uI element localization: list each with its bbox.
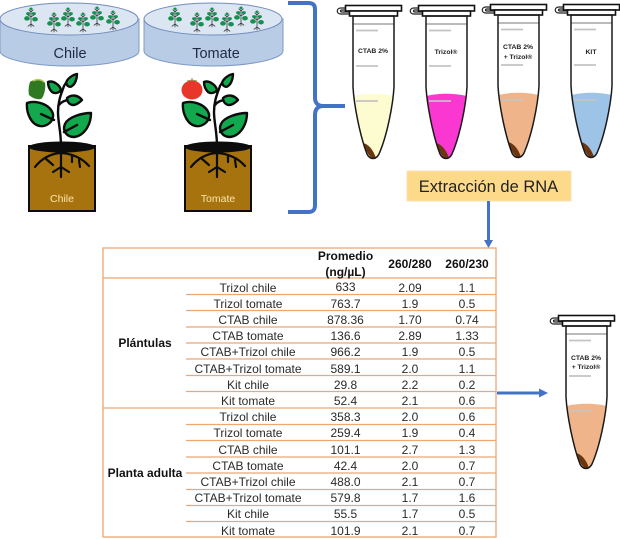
rows: Plántulas: 1.9 (402, 297, 419, 311)
table header: 260/280 (388, 257, 432, 271)
rows: Planta adulta: 488.0 (330, 475, 361, 489)
rows: Planta adulta: 0.7 (459, 524, 476, 538)
group label: Planta adulta: Planta adulta (108, 466, 183, 480)
rows: Plántulas: 52.4 (334, 394, 358, 408)
tube label: CTAB 2% (358, 48, 388, 55)
rows: Planta adulta: CTAB tomate (212, 459, 284, 473)
table header: 260/230 (445, 257, 489, 271)
rows: Planta adulta: 1.6 (459, 491, 476, 505)
rows: Plántulas: Trizol chile (220, 281, 277, 295)
rows: Plántulas: 0.74 (455, 313, 479, 327)
arrow: table to selected tube (497, 388, 548, 398)
rows: Plántulas: 589.1 (330, 362, 361, 376)
rows: Plántulas: 0.2 (459, 378, 476, 392)
table header: Promedio (318, 249, 373, 263)
tube: KIT (555, 4, 620, 158)
rows: Planta adulta: CTAB+Trizol chile (200, 475, 296, 489)
icon: green pepper (29, 80, 45, 99)
rows: Plántulas: 1.33 (455, 329, 479, 343)
rows: Planta adulta: 0.4 (459, 426, 476, 440)
rows: Plántulas: 2.09 (398, 281, 422, 295)
rows: Planta adulta: 2.0 (402, 410, 419, 424)
rows: Plántulas: CTAB tomate (212, 329, 284, 343)
tube label: Trizol® (435, 48, 457, 56)
rows: Planta adulta: 1.9 (402, 426, 419, 440)
rows: Plántulas: 0.5 (459, 297, 476, 311)
rows: Plántulas: 29.8 (334, 378, 358, 392)
rows: Plántulas: CTAB+Trizol chile (200, 345, 296, 359)
rows: Planta adulta: Trizol tomate (214, 426, 283, 440)
rows: Planta adulta: 358.3 (330, 410, 361, 424)
tube label line 2: + Trizol® (572, 363, 600, 371)
rows: Plántulas: 763.7 (330, 297, 361, 311)
rows: Plántulas: 878.36 (327, 313, 364, 327)
tube label: CTAB 2% (571, 355, 601, 362)
rows: Plántulas: Kit tomate (221, 394, 275, 408)
rows: Planta adulta: CTAB chile (218, 443, 278, 457)
rows: Planta adulta: 0.5 (459, 507, 476, 521)
petri dish: Tomate (144, 3, 283, 66)
tube label: KIT (586, 49, 597, 56)
rows: Planta adulta: 0.7 (459, 475, 476, 489)
tube label: CTAB 2% (503, 44, 533, 51)
rows: Plántulas: Kit chile (227, 378, 269, 392)
potted plant: Chile (27, 74, 95, 211)
rows: Planta adulta: 2.1 (402, 524, 419, 538)
rows: Planta adulta: 1.3 (459, 443, 476, 457)
rows: Planta adulta: Trizol chile (220, 410, 277, 424)
rows: Planta adulta: 2.0 (402, 459, 419, 473)
potted plant: Tomate (182, 74, 251, 211)
bracket (288, 3, 345, 212)
rows: Planta adulta: 101.1 (330, 443, 361, 457)
rows: Plántulas: 1.70 (398, 313, 422, 327)
rows: Plántulas: 0.6 (459, 394, 476, 408)
rows: Planta adulta: 579.8 (330, 491, 361, 505)
table header (318, 249, 489, 279)
rows: Plántulas: 1.9 (402, 345, 419, 359)
rows: Plántulas: 1.1 (459, 362, 476, 376)
rows: Planta adulta: 1.7 (402, 491, 419, 505)
rows: Plántulas: 0.5 (459, 345, 476, 359)
pot label: Chile: Chile (50, 193, 74, 205)
rows: Plántulas: 1.1 (459, 281, 476, 295)
tube: Trizol (410, 6, 474, 158)
tube: CTAB 2% + Trizol (482, 4, 546, 158)
tube: CTAB 2% (337, 6, 402, 158)
rows: Planta adulta: 259.4 (330, 426, 361, 440)
rows: Planta adulta: Kit chile (227, 507, 269, 521)
box: Extracción de RNA (407, 171, 571, 201)
rows: Plántulas: 2.2 (402, 378, 419, 392)
table header: (ng/µL) (325, 265, 366, 279)
arrow: down to table (484, 201, 493, 248)
petri dish: Chile (0, 3, 139, 66)
table (103, 248, 496, 538)
rows: Plántulas: CTAB+Trizol tomate (194, 362, 302, 376)
rows: Plántulas: 2.89 (398, 329, 422, 343)
rows: Plántulas (194, 280, 479, 408)
group label: Plántulas: Plántulas (118, 336, 172, 350)
rows: Plántulas: 2.0 (402, 362, 419, 376)
rows: Planta adulta: Kit tomate (221, 524, 275, 538)
rows: Planta adulta: 2.7 (402, 443, 419, 457)
tube: selected CTAB 2% + Trizol (550, 316, 614, 468)
rows: Planta adulta: 1.7 (402, 507, 419, 521)
rows: Plántulas: 633 (335, 280, 356, 294)
tube label line 2: + Trizol® (504, 53, 532, 61)
rows: Planta adulta: CTAB+Trizol tomate (194, 491, 302, 505)
dish label: Chile: Chile (53, 46, 87, 62)
rows: Planta adulta: 2.1 (402, 475, 419, 489)
rows: Planta adulta: 0.7 (459, 459, 476, 473)
rows: Plántulas: CTAB chile (218, 313, 278, 327)
rows: Plántulas: 136.6 (330, 329, 361, 343)
box text: Extracción de RNA (419, 178, 558, 196)
rows: Plántulas: 2.1 (402, 394, 419, 408)
rows: Plántulas: 966.2 (330, 345, 361, 359)
pot label: Tomate: Tomate (201, 193, 235, 205)
rows: Planta adulta: 101.9 (330, 524, 361, 538)
rows: Planta adulta: 0.6 (459, 410, 476, 424)
rows: Planta adulta: 42.4 (334, 459, 358, 473)
icon: tomato (182, 78, 202, 100)
rows: Planta adulta (194, 410, 476, 538)
dish label: Tomate: Tomate (192, 46, 240, 62)
rows: Planta adulta: 55.5 (334, 507, 358, 521)
rows: Plántulas: Trizol tomate (214, 297, 283, 311)
